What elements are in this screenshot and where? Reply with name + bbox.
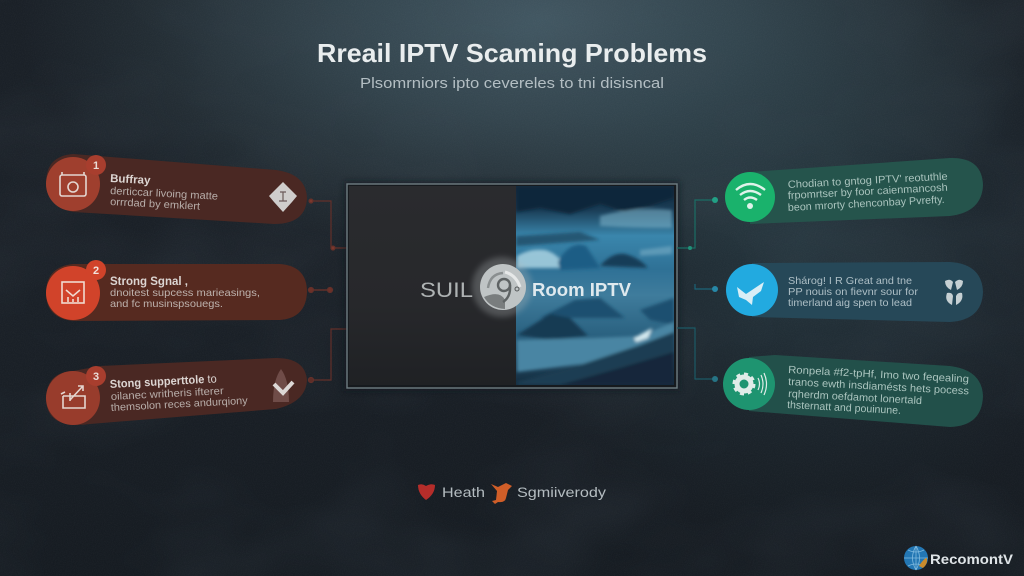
text: solution 3: rqherdm oefdamot lonertald [788, 388, 922, 407]
connectors: right [677, 197, 718, 382]
text: problem 3: Stong supperttole to [110, 373, 217, 391]
text: solution 3: Ronpela #f2-tpHf, Imo two feqealing [788, 364, 969, 385]
text: problem 2: and fc musinspsouegs. [110, 298, 223, 310]
text: solution 2: timerland aig spen to lead [788, 297, 912, 309]
text: problem 1: Buffray [110, 173, 151, 187]
text: solution 2: PP nouis on fievnr sour for [788, 286, 919, 298]
text: solution 2: Shárog! I R Great and tne [788, 275, 912, 287]
legend label 2: Sgmiiverody [517, 484, 606, 500]
panel: solution 2 [726, 262, 983, 322]
icon: chevron rocket [273, 369, 293, 402]
subtitle: Plsomrniors ipto cevereles to tni disisncal [360, 75, 664, 92]
connectors: left [308, 199, 347, 382]
text: solution 3: thsternatt and pouinune. [787, 399, 901, 417]
text: solution 3: tranos ewth insdiamésts hets pocess [788, 376, 969, 397]
panel: solution 1 [725, 158, 983, 224]
panel: problem 2 [46, 260, 307, 321]
icon: orange mascot [491, 483, 512, 504]
icon: camera badge: 1 [93, 160, 99, 172]
landscape image [516, 187, 674, 385]
tv label right: Room IPTV [532, 280, 631, 300]
logo emblem [472, 257, 532, 317]
text: problem 3 [110, 373, 249, 414]
brand name: RecomontV [930, 551, 1014, 567]
icon: camera badge [46, 155, 106, 211]
text: problem 1 [110, 173, 218, 213]
tv screen [344, 181, 680, 391]
text: solution 1 [788, 171, 948, 214]
icon: wifi badge [725, 172, 775, 222]
icon: gear badge [723, 358, 775, 410]
text: solution 3 [787, 364, 969, 417]
text: problem 1: derticcar livoing matte [110, 185, 218, 203]
text: problem 2 [110, 276, 260, 310]
text: problem 2: dnoitest supcess marieasings, [110, 287, 260, 299]
tv label left: SUIL [420, 279, 473, 302]
icon: globe [904, 546, 928, 570]
icon: chart badge [46, 260, 106, 320]
text: problem 3: oilanec writheris ifterer [111, 385, 225, 403]
text: problem 1: orrrdad by emklert [110, 196, 200, 213]
legend label 1: Heath [442, 484, 485, 500]
footer legend [418, 483, 606, 504]
icon: shield [418, 484, 435, 500]
text: solution 1: beon mrorty chenconbay Pvrefty. [788, 194, 945, 214]
text: problem 3: themsolon reces andurqiony [111, 395, 249, 414]
icon: box arrow badge: 3 [93, 371, 99, 383]
text: problem 2: Strong Sgnal , [110, 276, 188, 288]
panel: problem 1 [46, 154, 307, 224]
icon: chart badge: 2 [93, 265, 99, 277]
title: Rreail IPTV Scaming Problems [317, 38, 707, 68]
icon: plane badge [726, 264, 778, 316]
text: solution 1: frpomrtser by foor caienmancosh [788, 182, 948, 202]
icon: split heart [945, 280, 963, 305]
brand logo [904, 546, 1014, 570]
text: solution 2 [788, 275, 919, 309]
icon: diamond badge [269, 182, 297, 212]
panel: solution 3 [723, 355, 983, 427]
text: solution 1: Chodian to gntog IPTV' reotuthle [788, 171, 948, 191]
panel: problem 3 [46, 358, 307, 425]
icon: box arrow badge [46, 366, 106, 425]
